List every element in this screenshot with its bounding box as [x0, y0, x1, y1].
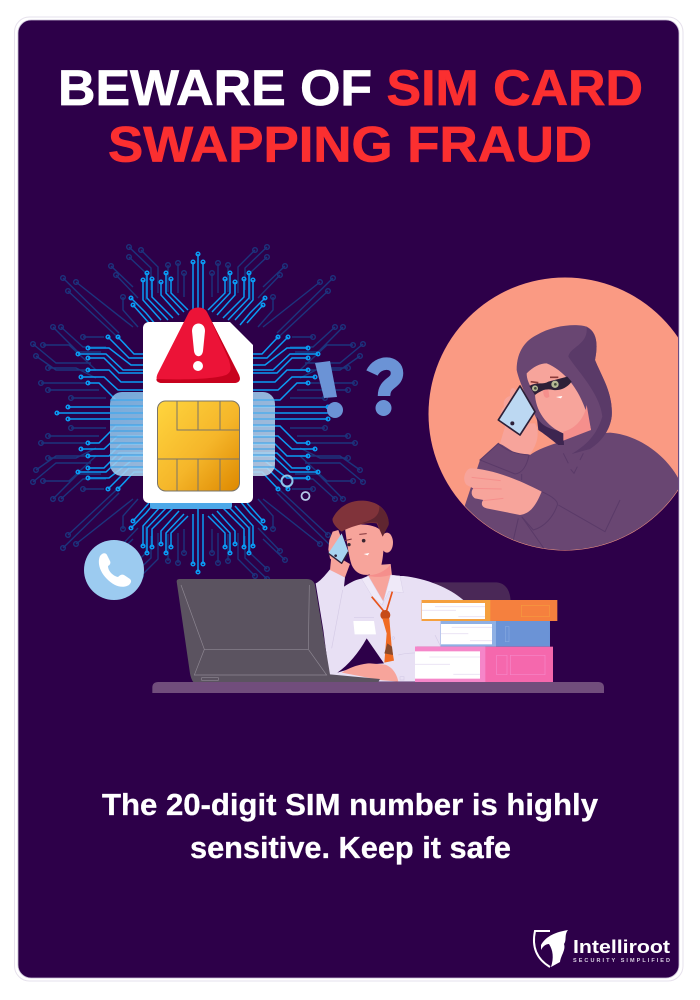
hands on keyboard [342, 663, 398, 682]
caption line 1: The 20-digit SIM number is highly [102, 788, 598, 822]
warning triangle [156, 308, 240, 383]
Intelliroot logo [534, 930, 670, 967]
collar [362, 575, 403, 605]
phone call icon [84, 540, 144, 600]
logo tagline: SECURITY SIMPLIFIED [573, 958, 670, 964]
exclamation mark icon [315, 361, 343, 418]
gold SIM chip [158, 401, 240, 491]
hooded scammer figure [464, 325, 678, 550]
orange binder [422, 600, 557, 621]
desk [152, 682, 604, 693]
small rings [282, 476, 310, 500]
shirt [316, 569, 463, 682]
man at desk on phone [152, 501, 604, 693]
shirt fold lines [332, 590, 441, 680]
question mark icon [372, 364, 397, 416]
circuit board traces [31, 245, 365, 581]
logo wordmark: Intelliroot [573, 937, 670, 957]
caption [102, 788, 598, 865]
neck [368, 564, 392, 602]
chip halo behind SIM [110, 392, 275, 509]
logo shield icon [534, 930, 568, 967]
scammer portrait circle [428, 278, 678, 550]
laptop [177, 579, 380, 682]
chair back [433, 582, 511, 603]
head [332, 501, 393, 577]
hand holding phone [328, 530, 348, 565]
name badge [353, 621, 376, 634]
title line 2: SWAPPING FRAUD [108, 116, 592, 172]
blue binder [441, 621, 550, 647]
stack of binders [415, 600, 557, 682]
gap between arm and torso [337, 638, 384, 673]
title line 1: BEWARE OF SIM CARD [58, 59, 643, 116]
arm raised to phone [330, 553, 350, 577]
title [58, 59, 643, 172]
pink binder [415, 647, 553, 682]
orange tie [372, 592, 394, 663]
caption line 2: sensitive. Keep it safe [190, 831, 511, 865]
SIM card [143, 308, 253, 503]
